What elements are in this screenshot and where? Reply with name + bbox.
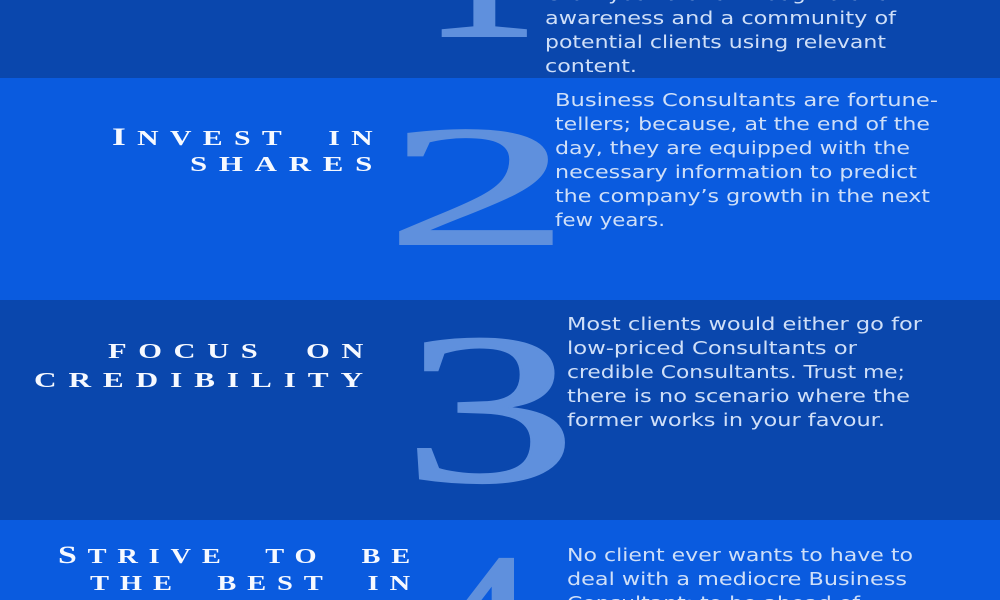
text block: step 2 description: Business Consultants are fortune- (555, 91, 938, 111)
heading: invest in shares (112, 124, 384, 176)
text block: step 2 description: day, they are equipped with the (555, 139, 910, 159)
text block: step 3 description: there is no scenario where the (567, 387, 910, 407)
text block: step 2 description: the company’s growth in the next (555, 187, 930, 207)
text block: step 1 description: content. (545, 57, 637, 77)
number 2: 2 (385, 92, 571, 282)
heading: focus on credibility (34, 339, 375, 392)
heading: focus on credibility: CREDIBILITY (34, 368, 375, 392)
text block: step 3 description: Most clients would either go for (567, 315, 923, 335)
panel: step 4 (0, 508, 1000, 600)
text block: step 1 description: potential clients using relevant (545, 33, 886, 53)
text block: step 4 description: No client ever wants to have to (567, 546, 913, 566)
heading: strive to be the best: THE BEST IN (90, 571, 421, 595)
text block: step 1 description (545, 0, 897, 77)
text block: step 3 description: credible Consultants. Trust me; (567, 363, 905, 383)
panel: step 3 (0, 289, 1000, 528)
text block: step 3 description: low-priced Consultants or (567, 339, 858, 359)
heading: invest in shares: I NVEST IN (112, 124, 384, 151)
heading: invest in shares: SHARES (190, 152, 384, 176)
text block: step 4 description: deal with a mediocre Business (567, 570, 907, 590)
heading: strive to be the best (58, 542, 421, 595)
text block: step 2 description: few years. (555, 211, 665, 231)
number 3: 3 (402, 289, 577, 528)
panel: step 2 (0, 78, 1000, 300)
text block: step 2 description: necessary information to predict (555, 163, 917, 183)
text block: step 2 description (555, 91, 938, 231)
text block: step 1 description: awareness and a community of (545, 9, 897, 29)
text block: step 3 description: former works in your favour. (567, 411, 885, 431)
text block: step 3 description (567, 315, 923, 431)
text block: step 2 description: tellers; because, at the end of the (555, 115, 930, 135)
heading: focus on credibility: FOCUS ON (108, 339, 375, 363)
text block: step 4 description (567, 546, 913, 600)
heading: strive to be the best: S TRIVE TO BE (58, 542, 421, 569)
panel: step 1 (0, 0, 1000, 85)
